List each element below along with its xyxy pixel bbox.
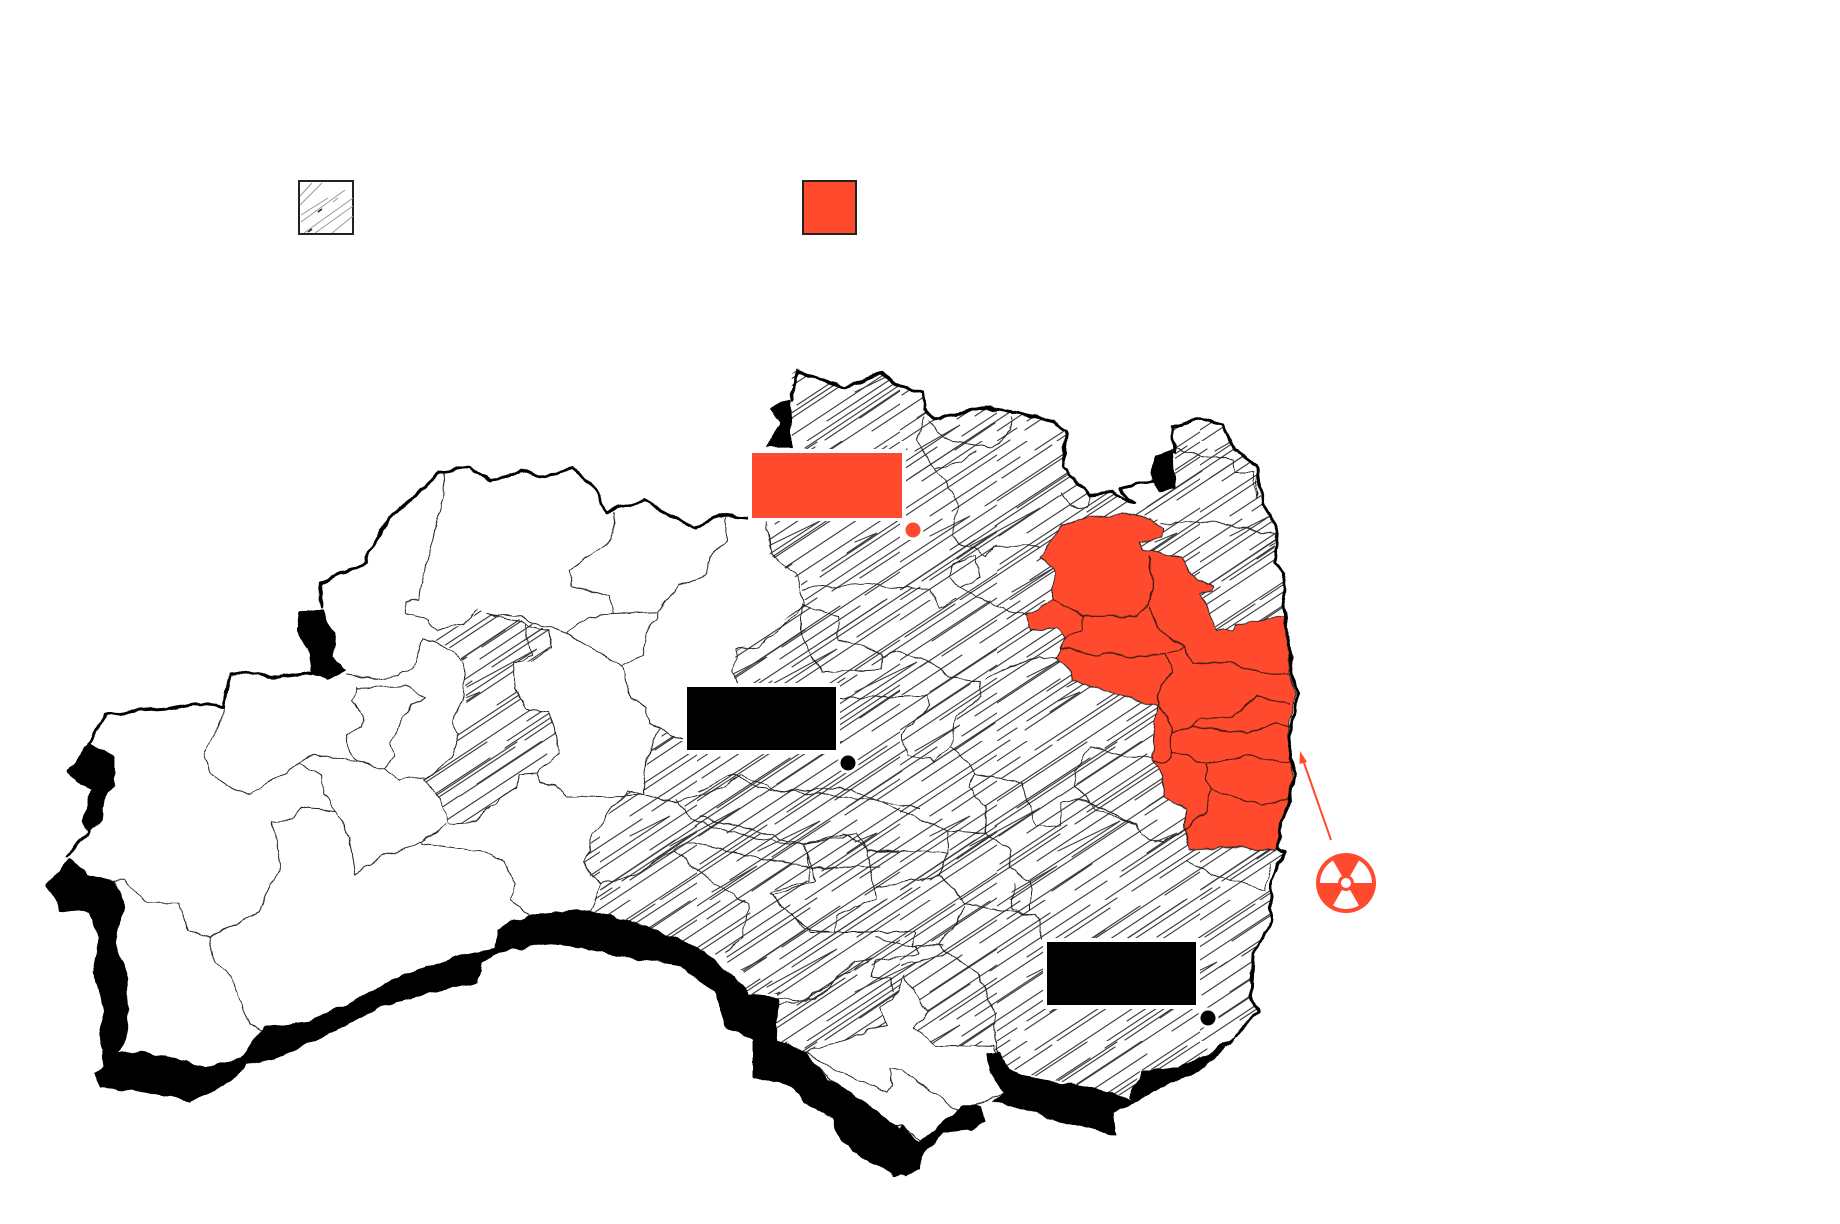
black shadow bands: west and south [46, 467, 920, 1177]
south-east coast shadow [1129, 1036, 1237, 1102]
exclusion zone in red [1027, 513, 1294, 850]
notch: north [767, 399, 792, 447]
label box: red city [748, 449, 906, 521]
notch: north-west [296, 608, 346, 679]
internal boundaries: east [700, 416, 1274, 1062]
internal boundaries: west [114, 472, 920, 1033]
south-east band [987, 1052, 1134, 1135]
label box: black city west [683, 683, 840, 754]
south band tip [884, 1107, 985, 1176]
notch: north-east [1152, 450, 1175, 489]
icon: radiation hazard [1316, 853, 1376, 913]
white southern region [803, 977, 1003, 1143]
arrow to plant [1300, 751, 1331, 840]
blob: far west [67, 743, 114, 833]
marker: red city [904, 521, 922, 539]
map [45, 368, 1300, 1177]
legend: hatched swatch [299, 181, 353, 234]
black shadow bands: east [767, 369, 1297, 1176]
marker: black city south-east [1199, 1009, 1217, 1027]
map linework [46, 369, 1297, 1177]
legend: red swatch [803, 181, 856, 234]
marker: black city west [839, 754, 857, 772]
label box: black city south-east [1043, 938, 1200, 1009]
east outline [792, 369, 1297, 1036]
hatched area [424, 370, 1294, 1096]
west outline [67, 467, 748, 856]
south coast band [46, 859, 920, 1177]
